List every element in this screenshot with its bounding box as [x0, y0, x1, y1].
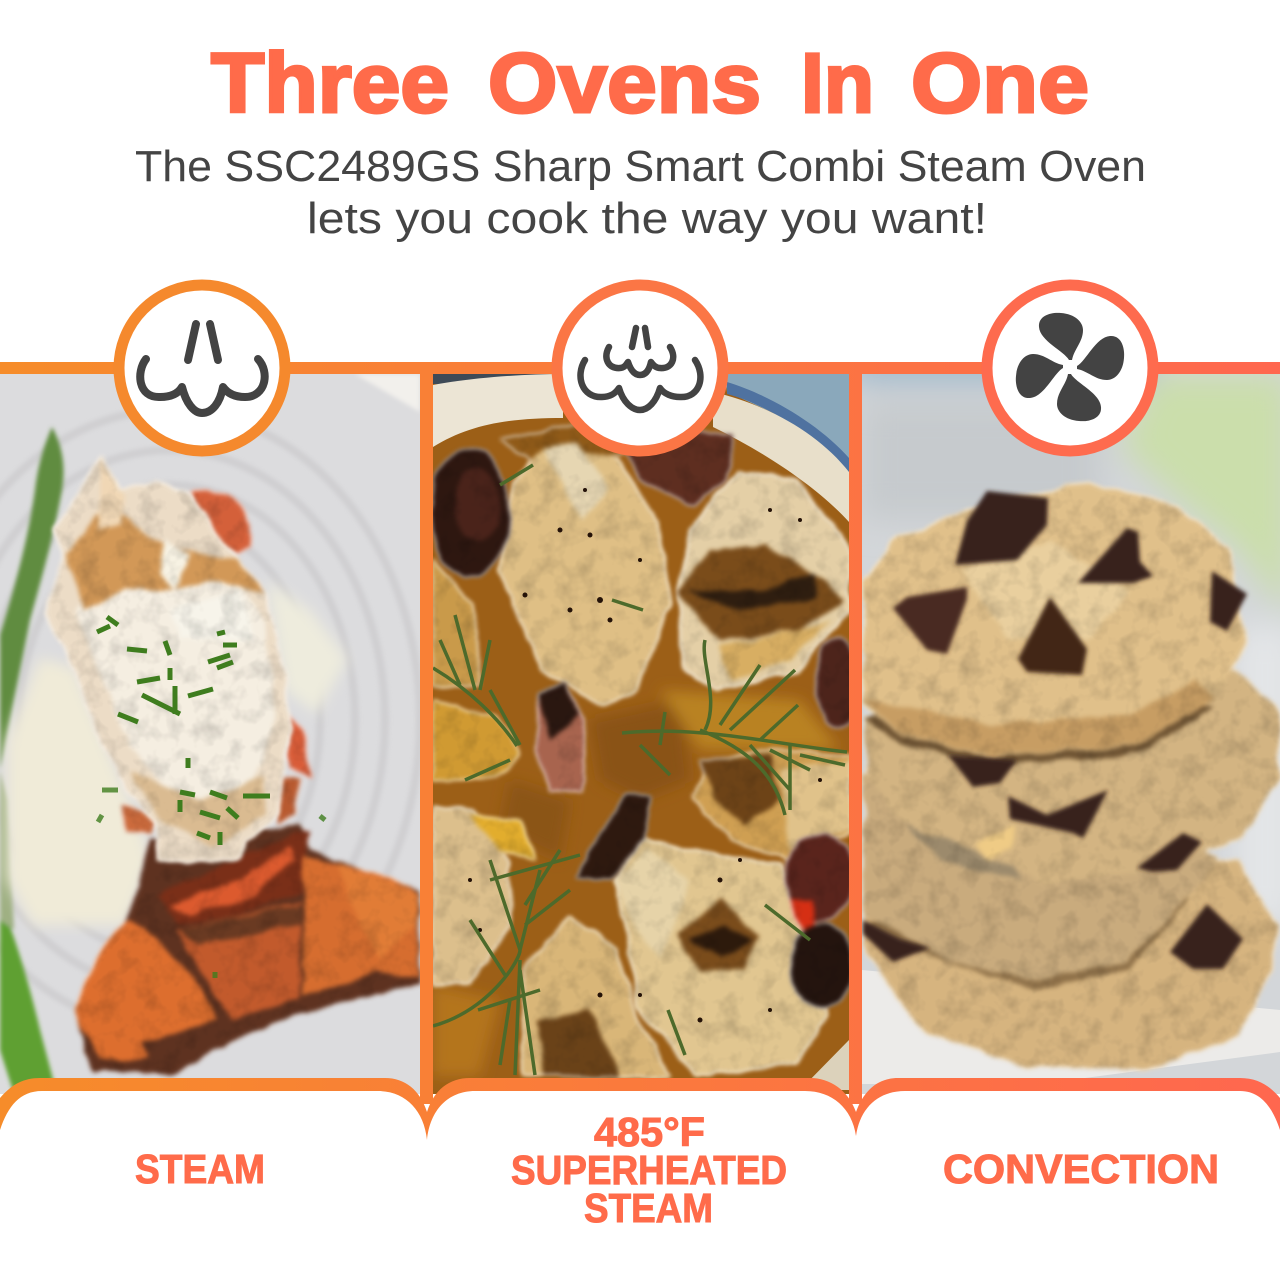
label: 485F superheated steam: SUPERHEATED [511, 1147, 787, 1193]
icon: double steam cloud [580, 328, 700, 410]
icon badge: steam [119, 285, 285, 451]
lobster shell [66, 491, 420, 1076]
label: steam: STEAM [135, 1146, 265, 1192]
label: 485F superheated steam [511, 1109, 787, 1231]
label: 485F superheated steam: STEAM [584, 1185, 713, 1231]
label: convection: CONVECTION [943, 1146, 1219, 1192]
sauce variation [433, 690, 840, 1076]
sausages [430, 430, 860, 1008]
subtitle: The SSC2489GS Sharp Smart Combi Steam Oven [135, 142, 1146, 191]
chicken pieces [433, 420, 850, 1076]
pot rim and cloth [433, 374, 849, 1090]
title [211, 36, 1089, 130]
lobster meat [45, 457, 290, 862]
panel: steam lobster photo [0, 374, 420, 1094]
label: 485F superheated steam: 485°F [594, 1109, 705, 1155]
vertical dividers [420, 374, 862, 1104]
chives [97, 617, 325, 978]
title: Three [211, 36, 449, 130]
sauce [7, 581, 347, 925]
icon badge: convection fan [987, 285, 1153, 451]
icon badge: superheated steam [557, 285, 723, 451]
title: Ovens [488, 36, 761, 130]
parchment paper [862, 970, 1280, 1084]
icon: fan [1016, 313, 1124, 421]
orange band [0, 362, 1280, 374]
subtitle [135, 142, 1146, 243]
panel: superheated steam chicken photo [430, 374, 860, 1094]
title: One [911, 36, 1089, 130]
asparagus [0, 427, 64, 1094]
pepper specks [468, 488, 822, 1022]
cookie stack [863, 482, 1280, 1072]
panel: convection cookies photo [850, 355, 1280, 1094]
title: In [801, 36, 874, 130]
rosemary [433, 465, 847, 1075]
icon: steam cloud [140, 324, 265, 413]
bottom label frames [0, 1078, 1280, 1280]
subtitle: lets you cook the way you want! [307, 194, 987, 243]
chocolate chips [863, 491, 1247, 969]
